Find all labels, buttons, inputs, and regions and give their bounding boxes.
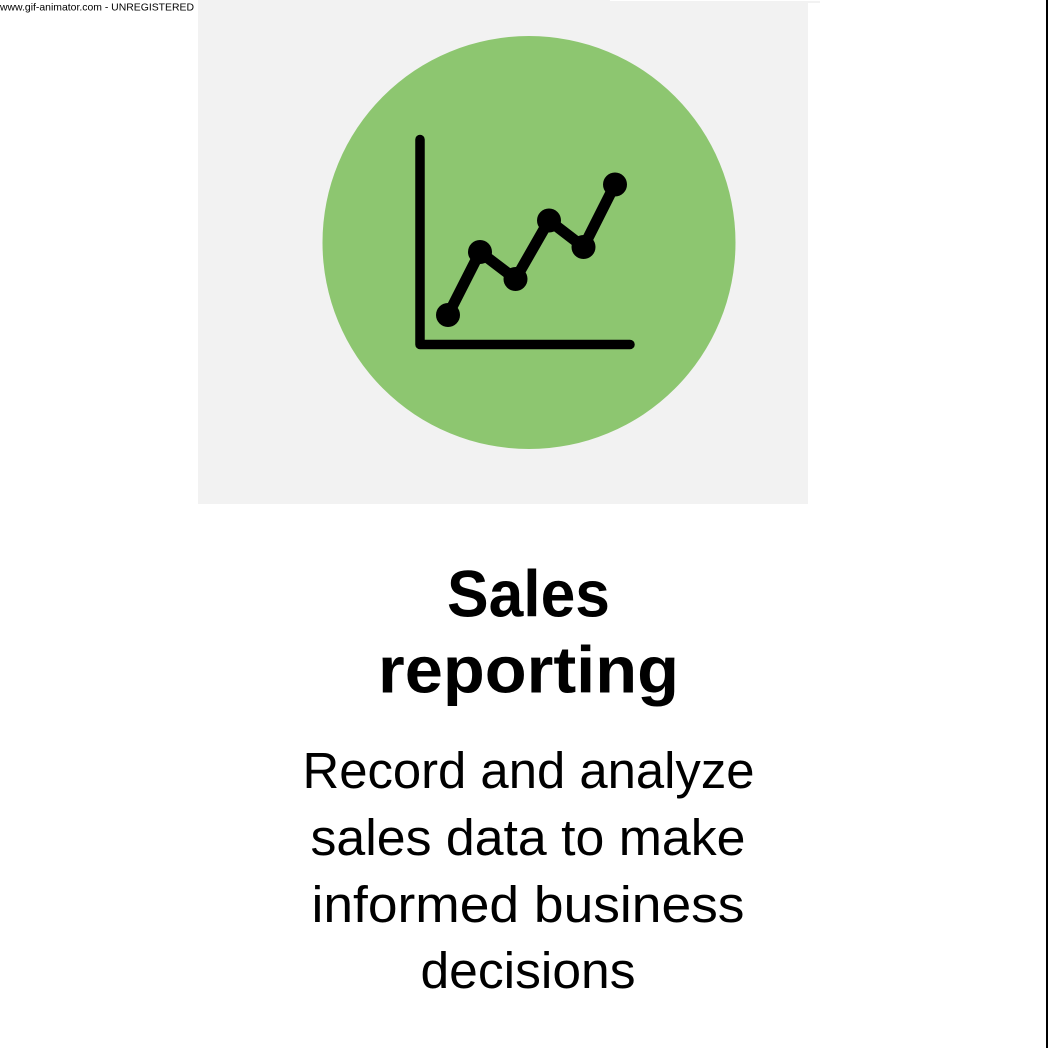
chart points (436, 172, 627, 327)
description text (302, 742, 754, 999)
description text: sales data to make (310, 809, 746, 866)
description text: decisions (420, 942, 636, 999)
right edge line (1046, 0, 1048, 1048)
watermark: www.gif-animator.com - UNREGISTERED (0, 2, 194, 14)
heading: Sales (447, 556, 610, 630)
description text: informed business (312, 876, 744, 933)
panel: icon background (198, 0, 808, 504)
chart axes (420, 140, 630, 344)
description text: Record and analyze (302, 742, 754, 799)
heading (378, 556, 679, 706)
chart line (448, 184, 615, 315)
icon: green circle with line chart (322, 36, 736, 449)
heading: reporting (378, 632, 679, 706)
